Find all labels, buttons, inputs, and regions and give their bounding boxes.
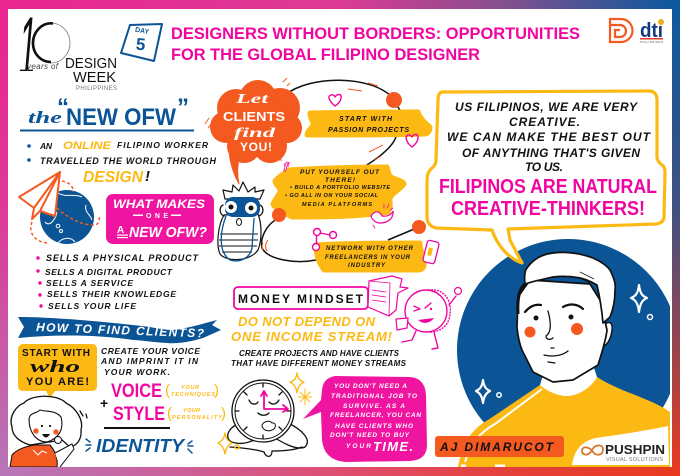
formula: voice plus style equals identity: IDENTITY xyxy=(96,436,186,456)
list: sells: SELLS A SERVICE xyxy=(46,278,133,288)
node: put yourself out there xyxy=(272,159,404,228)
node: put yourself out there: THERE! xyxy=(325,177,356,184)
node: put yourself out there: PUT YOURSELF OUT xyxy=(300,169,380,176)
name tag: AJ Dimarucot: AJ DIMARUCOT xyxy=(439,440,555,454)
callout: you don't need a traditional job: HAVE CLIENTS WHO xyxy=(335,423,413,430)
speech bubble: quote: OF ANYTHING THAT'S GIVEN xyxy=(462,146,640,160)
callout: start with who you are: YOU ARE! xyxy=(26,376,89,388)
illustration: portrait of AJ Dimarucot xyxy=(457,239,679,467)
logo: 10 years of Design Week Philippines: WEEK xyxy=(73,69,116,86)
speech bubble: quote: CREATIVE. xyxy=(509,115,580,129)
callout: start with who you are: START WITH xyxy=(22,348,90,359)
node: put yourself out there: f xyxy=(282,159,291,175)
logo: 10 years of Design Week Philippines: DESIGN xyxy=(65,55,117,72)
logo: 10 years of Design Week Philippines: PHILIPPINES xyxy=(76,86,117,92)
callout: let clients find you: CLIENTS xyxy=(223,109,285,124)
callout: you don't need a traditional job: TIME. xyxy=(373,439,413,454)
icon: globe and paper plane xyxy=(19,172,99,244)
node: network with other freelancers xyxy=(312,220,439,270)
node: network with other freelancers: FREELANCERS IN YOUR xyxy=(325,255,411,261)
callout: you don't need a traditional job xyxy=(303,376,427,462)
logo: 10 years of Design Week Philippines xyxy=(20,18,117,90)
formula: voice plus style equals identity: YOUR xyxy=(183,408,200,414)
callout: you don't need a traditional job: YOU DON'T NEED A xyxy=(334,383,407,390)
illustration: girl thinking xyxy=(10,396,87,467)
logo: Pushpin Visual Solutions xyxy=(572,426,669,465)
formula: voice plus style equals identity xyxy=(86,381,226,456)
node: network with other freelancers: NETWORK WITH OTHER xyxy=(326,246,414,252)
formula: voice plus style equals identity: ( xyxy=(165,382,170,399)
text: create projects xyxy=(231,349,407,368)
formula: voice plus style equals identity: PERSONALITY xyxy=(172,415,223,421)
formula: voice plus style equals identity: ( xyxy=(167,405,172,422)
text: do not depend on one income stream xyxy=(231,314,393,344)
callout: what makes one a new OFW: WHAT MAKES xyxy=(113,197,205,211)
formula: voice plus style equals identity: VOICE xyxy=(111,381,162,402)
logo: 10 years of Design Week Philippines: years of xyxy=(26,62,59,71)
callout: what makes one a new OFW: A xyxy=(117,225,124,236)
node: start with passion projects xyxy=(307,92,430,147)
title xyxy=(171,24,580,64)
node: start with passion projects: START WITH xyxy=(339,116,393,123)
text: new OFW bullets: ! xyxy=(145,168,150,185)
icon: stack of papers xyxy=(368,276,408,316)
formula: voice plus style equals identity: STYLE xyxy=(113,404,165,425)
node: put yourself out there: MEDIA PLATFORMS xyxy=(302,202,372,208)
callout: let clients find you: find xyxy=(234,126,277,141)
logo: Pushpin Visual Solutions: PUSHPIN xyxy=(605,442,665,457)
text: do not depend on one income stream: ONE INCOME STREAM! xyxy=(231,329,393,344)
callout: you don't need a traditional job: TRADITIONAL JOB TO xyxy=(331,393,417,400)
callout: start with who you are xyxy=(18,344,97,398)
text: new OFW bullets: ONLINE xyxy=(63,140,112,152)
icon: day 5 calendar: 5 xyxy=(135,35,146,54)
illustration: meditating clock xyxy=(228,380,307,456)
icon: day 5 calendar xyxy=(121,24,162,61)
text: create projects: THAT HAVE DIFFERENT MONEY STREAMS xyxy=(231,359,407,368)
callout: let clients find you xyxy=(205,78,302,184)
icons: yellow sparkles xyxy=(218,373,312,454)
callout: what makes one a new OFW xyxy=(106,194,214,244)
logos: D mark and dti: dti xyxy=(640,20,663,42)
callout: you don't need a traditional job: SURVIVE. AS A xyxy=(343,403,405,410)
title: DESIGNERS WITHOUT BORDERS: OPPORTUNITIES xyxy=(171,24,580,43)
heading: the new OFW: NEW OFW xyxy=(66,104,176,131)
speech bubble: quote: WE CAN MAKE THE BEST OUT xyxy=(447,130,652,144)
text: create your voice xyxy=(100,346,200,377)
heading: the new OFW: “ xyxy=(57,94,69,121)
speech bubble: quote: CREATIVE-THINKERS! xyxy=(451,198,645,220)
text: create projects: CREATE PROJECTS AND HAVE CLIENTS xyxy=(239,349,400,358)
callout: what makes one a new OFW: NEW OFW? xyxy=(129,224,207,241)
text: new OFW bullets: AN xyxy=(39,141,53,151)
text: create your voice: YOUR WORK. xyxy=(104,367,170,377)
illustration: character with goggles xyxy=(218,182,268,261)
callout: let clients find you: YOU! xyxy=(240,140,272,154)
text: create your voice: CREATE YOUR VOICE xyxy=(101,346,200,356)
text: create your voice: AND IMPRINT IT IN xyxy=(100,356,199,366)
callout: what makes one a new OFW: ONE xyxy=(146,213,168,220)
text: new OFW bullets: TRAVELLED THE WORLD THROUGH xyxy=(40,156,216,166)
formula: voice plus style equals identity: YOUR xyxy=(181,385,199,391)
node: network with other freelancers: INDUSTRY xyxy=(348,263,386,269)
list: sells xyxy=(36,253,199,311)
callout: you don't need a traditional job: DON'T NEED TO BUY xyxy=(330,432,410,439)
list: sells: SELLS THEIR KNOWLEDGE xyxy=(47,289,176,299)
title: FOR THE GLOBAL FILIPINO DESIGNER xyxy=(171,45,480,64)
callout: start with who you are: who xyxy=(30,357,80,376)
text: new OFW bullets xyxy=(27,140,217,186)
node: start with passion projects: PASSION PROJECTS xyxy=(328,127,409,134)
heading: the new OFW xyxy=(20,94,194,132)
callout: let clients find you: Let xyxy=(234,92,270,107)
formula: voice plus style equals identity: + xyxy=(100,395,108,411)
formula: voice plus style equals identity: ) xyxy=(214,382,219,399)
node: put yourself out there: • GO ALL IN ON YOUR SOCIAL xyxy=(285,193,379,199)
callout: you don't need a traditional job: FREELANCER, YOU CAN xyxy=(330,412,421,419)
text: new OFW bullets: FILIPINO WORKER xyxy=(117,140,209,150)
formula: voice plus style equals identity: TECHNIQUES xyxy=(171,392,215,398)
connector lines xyxy=(262,80,419,262)
speech bubble: quote xyxy=(427,91,665,263)
icon: happy coin character xyxy=(396,288,462,349)
heading: money mindset xyxy=(234,287,368,309)
speech bubble: quote: TO US. xyxy=(525,160,563,174)
list: sells: SELLS A PHYSICAL PRODUCT xyxy=(46,253,200,263)
text: new OFW bullets: DESIGN xyxy=(83,169,143,186)
speech bubble: quote: US FILIPINOS, WE ARE VERY xyxy=(455,100,638,114)
banner: how to find clients xyxy=(18,317,221,343)
heading: money mindset: MONEY MINDSET xyxy=(238,292,364,306)
formula: voice plus style equals identity: ) xyxy=(221,405,226,422)
name tag: AJ Dimarucot xyxy=(435,436,564,457)
icon: day 5 calendar: DAY xyxy=(134,27,150,36)
speech bubble: quote: FILIPINOS ARE NATURAL xyxy=(439,176,657,198)
text: do not depend on one income stream: DO NOT DEPEND ON xyxy=(238,314,376,329)
callout: you don't need a traditional job: YOUR xyxy=(346,443,371,450)
list: sells: SELLS A DIGITAL PRODUCT xyxy=(45,267,173,277)
node: put yourself out there: • BUILD A PORTFOLIO WEBSITE xyxy=(290,185,390,191)
banner: how to find clients: HOW TO FIND CLIENTS? xyxy=(36,320,205,340)
list: sells: SELLS YOUR LIFE xyxy=(48,301,136,311)
logos: D mark and dti xyxy=(610,19,664,44)
logo: 10 years of Design Week Philippines: 1 xyxy=(15,0,41,95)
logos: D mark and dti: PHILIPPINES xyxy=(640,40,663,44)
heading: the new OFW: the xyxy=(28,108,63,127)
logo: Pushpin Visual Solutions: VISUAL SOLUTIONS xyxy=(606,457,663,463)
heading: the new OFW: ” xyxy=(177,94,189,121)
